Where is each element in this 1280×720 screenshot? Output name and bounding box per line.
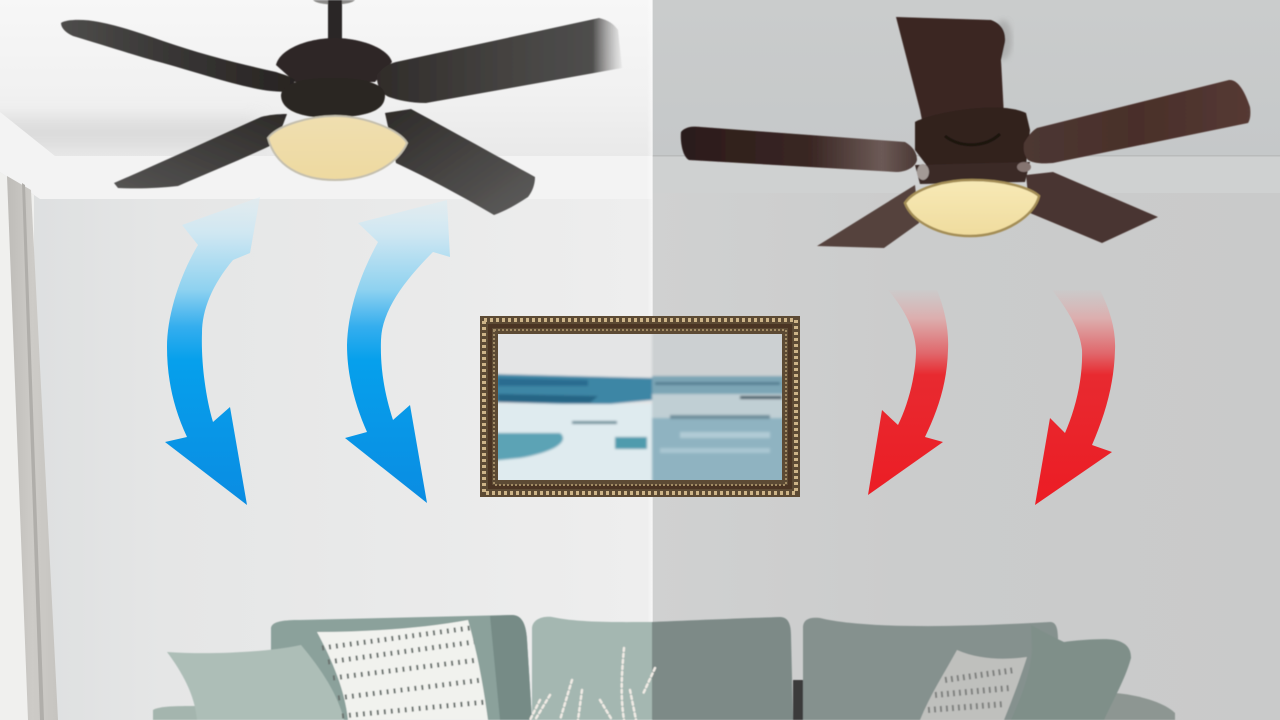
- cushion: patterned white: [317, 620, 488, 720]
- arrow: red airflow left: [868, 290, 948, 495]
- cushion: right sage: [1011, 625, 1131, 720]
- panel: dividing line: [647, 0, 653, 720]
- cushion: left sage: [167, 645, 344, 720]
- panel: left room half: [0, 0, 652, 720]
- sofa: [153, 615, 1175, 720]
- picture: framed seascape: [480, 316, 800, 497]
- icon: left ceiling fan: [61, 0, 622, 215]
- arrow: red airflow right: [1035, 290, 1115, 505]
- arrow: blue airflow right: [345, 200, 450, 503]
- plant: [530, 648, 655, 720]
- arrow: blue airflow left: [165, 197, 260, 505]
- panel: right room half: [652, 0, 1280, 720]
- icon: right ceiling fan: [681, 17, 1250, 248]
- cushion: right grey pattern: [920, 650, 1027, 720]
